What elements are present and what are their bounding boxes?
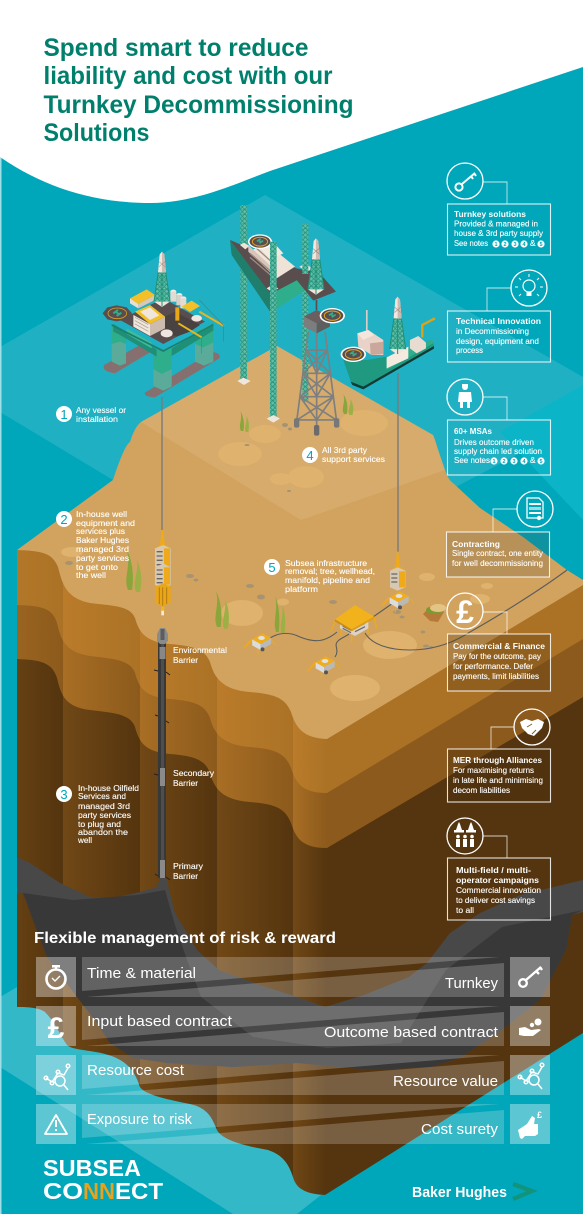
jack-up rig — [230, 224, 336, 315]
note 5 — [264, 558, 375, 594]
note 2: 2 — [60, 512, 68, 527]
panel: turnkey solutions: Turnkey solutions — [454, 209, 526, 219]
panel: turnkey solutions: 5 — [539, 242, 543, 248]
white header wave — [0, 0, 583, 203]
icon: light bulb — [511, 270, 547, 306]
note 3: party services — [78, 810, 131, 820]
note 3: Services and — [78, 791, 126, 801]
logo: Subsea Connect — [43, 1155, 164, 1204]
note 5: Subsea infrastructure — [285, 558, 367, 568]
note 4 — [302, 445, 385, 464]
barrier label: primary — [173, 861, 204, 881]
note 4: All 3rd party — [322, 445, 368, 455]
panel: MSAs: 5 — [539, 459, 543, 465]
barrier label: secondary — [173, 768, 215, 788]
panel: MSAs: supply chain led solution — [454, 446, 542, 456]
panel: contracting: Contracting — [452, 539, 500, 549]
panel: technical innovation: design, equipment and — [456, 336, 539, 346]
bar labels: Resource value — [393, 1074, 498, 1090]
note 5: 5 — [268, 560, 276, 575]
jack-up rig legs back — [237, 205, 308, 423]
note 5: platform — [285, 584, 318, 594]
icon: resource network — [44, 1064, 70, 1090]
barrier label: secondary: Secondary — [173, 768, 215, 778]
left edge strip — [0, 0, 2, 1214]
well bore — [154, 628, 170, 880]
icon: platforms and people — [447, 818, 483, 854]
note 3: well — [77, 835, 92, 845]
subsea manifold — [331, 605, 377, 642]
icon: hand with coin — [519, 1018, 542, 1036]
panel: MSAs: 3 — [512, 459, 516, 465]
right tool stack — [390, 552, 405, 591]
rock block cross section — [17, 540, 583, 1200]
bottom panel: flexible management — [34, 930, 550, 1144]
panel: MSAs: 4 — [522, 459, 526, 465]
title — [44, 34, 354, 147]
icon: thumbs up: £ — [537, 1110, 542, 1120]
icon: document — [517, 491, 553, 527]
cables — [270, 570, 567, 657]
icon squares — [36, 957, 550, 1144]
rocks — [65, 423, 433, 648]
riser left — [161, 397, 163, 530]
panel: multi-field campaigns: Multi-field / multi- — [456, 865, 531, 875]
note 1 — [56, 405, 126, 424]
panel: turnkey solutions: See notes — [454, 238, 488, 248]
icon: network — [518, 1063, 544, 1089]
panel: MER through alliances: in late life and minimising — [453, 775, 543, 785]
note 5: manifold, pipeline and — [285, 575, 370, 585]
note 2 — [56, 509, 135, 580]
logo: Subsea Connect: ECT — [115, 1178, 164, 1204]
icon: thumbs up — [518, 1110, 542, 1139]
ROV unit left — [244, 633, 276, 655]
logo: Subsea Connect: SUBSEA — [43, 1155, 141, 1181]
bar labels: Input based contract — [87, 1014, 232, 1030]
title: Turnkey Decommissioning — [44, 91, 354, 119]
note 3 — [56, 783, 139, 845]
row 3 bars — [82, 1055, 504, 1095]
note 2: party services — [76, 553, 129, 563]
note 1: Any vessel or — [76, 405, 126, 415]
title: Solutions — [44, 119, 150, 147]
panel: contracting: Single contract, one entity — [452, 548, 544, 558]
note 2: Baker Hughes — [76, 535, 129, 545]
note 1: 1 — [60, 407, 68, 422]
ROV unit right — [381, 591, 414, 613]
note 2: to get onto — [76, 562, 118, 572]
panel: contracting: for well decommissioning — [452, 558, 543, 568]
panel: multi-field campaigns — [447, 818, 550, 920]
note 2: services plus — [76, 526, 125, 536]
panel: MER through alliances: MER through Alliances — [453, 755, 542, 765]
panel: turnkey solutions: & — [530, 238, 536, 248]
barrier label: environmental: Environmental — [173, 645, 227, 655]
panel: MSAs: 1 — [492, 459, 496, 465]
heading: Flexible management of risk & reward — [34, 930, 336, 947]
panel: technical innovation: process — [456, 345, 483, 355]
bar labels — [87, 966, 499, 1138]
title: liability and cost with our — [44, 62, 333, 90]
barrier label: environmental — [173, 645, 227, 665]
panel: technical innovation — [448, 270, 550, 362]
panel: technical innovation: Technical Innovation — [456, 316, 541, 326]
panel: commercial and finance: for performance. Defer — [453, 661, 533, 671]
note 2: equipment and — [76, 518, 135, 528]
bar labels: Turnkey — [445, 976, 499, 992]
panel: MER through alliances — [448, 709, 550, 802]
logo: Subsea Connect: NN — [83, 1178, 115, 1204]
panel: MSAs: 2 — [502, 459, 506, 465]
well intervention tool stack — [155, 530, 171, 615]
panel: MSAs: See notes — [454, 455, 490, 465]
panel: multi-field campaigns: to all — [456, 905, 474, 915]
panel: technical innovation: in Decommissioning — [456, 326, 529, 336]
seabed surface — [17, 346, 583, 739]
barrier label: primary: Primary — [173, 861, 204, 871]
panel: multi-field campaigns: to deliver cost savings — [456, 895, 535, 905]
bar labels: Cost surety — [421, 1122, 499, 1138]
barrier label: environmental: Barrier — [173, 655, 198, 665]
note 3: 3 — [60, 787, 68, 802]
panel: MSAs: 60+ MSAs — [454, 426, 492, 436]
note 3: to plug and — [78, 819, 121, 829]
lighter seabed diamond — [0, 195, 583, 490]
panel: turnkey solutions: 1 — [494, 242, 498, 248]
seabed mound — [423, 604, 446, 622]
riser right — [397, 373, 399, 552]
panel: turnkey solutions: 2 — [503, 242, 507, 248]
panel: turnkey solutions: 4 — [522, 242, 526, 248]
note 4: support services — [322, 454, 385, 464]
title: Spend smart to reduce — [44, 34, 309, 62]
panel: MER through alliances: For maximising returns — [453, 765, 534, 775]
note 3: managed 3rd — [78, 801, 130, 811]
icon: worker — [447, 379, 483, 415]
panel: commercial and finance: Commercial & Finance — [453, 641, 545, 651]
bar labels: Resource cost — [87, 1063, 184, 1079]
panel: multi-field campaigns: Commercial innovation — [456, 885, 541, 895]
barrier label: secondary: Barrier — [173, 778, 198, 788]
icon: warning triangle — [45, 1115, 67, 1134]
ROV unit lower — [307, 656, 340, 678]
bar labels: Time & material — [87, 966, 196, 982]
note 2: In-house well — [76, 509, 127, 519]
brighter sea wedge — [500, 385, 583, 520]
panel: turnkey solutions — [447, 163, 550, 255]
logo: Baker Hughes: Baker Hughes — [412, 1184, 507, 1201]
icon: pound: £ — [48, 1012, 65, 1045]
panel: commercial and finance — [447, 593, 550, 691]
panel: multi-field campaigns: operator campaigns — [456, 875, 539, 885]
panel: turnkey solutions: 3 — [513, 242, 517, 248]
panel: commercial and finance: Pay for the outcome, pay — [453, 651, 542, 661]
note 1: installation — [76, 414, 118, 424]
note 3: abandon the — [78, 827, 128, 837]
icon: handshake — [514, 709, 550, 745]
row 2 bars — [82, 1006, 504, 1046]
logo: Subsea Connect: CO — [43, 1178, 83, 1204]
panel: commercial and finance: payments, limit liabilities — [453, 671, 539, 681]
sand patches — [61, 410, 493, 701]
subsea seaweed — [126, 394, 353, 634]
panel: MER through alliances: decom liabilities — [453, 785, 510, 795]
barrier label: primary: Barrier — [173, 871, 198, 881]
note 4: 4 — [306, 448, 314, 463]
icon: stopwatch — [46, 965, 66, 988]
note 2: the well — [76, 570, 106, 580]
note 2: managed 3rd — [76, 544, 129, 554]
panel: turnkey solutions: Provided & managed in — [454, 218, 538, 228]
icon: key circle — [447, 163, 483, 199]
note 3: In-house Oilfield — [78, 783, 139, 793]
bar labels: Outcome based contract — [324, 1025, 498, 1041]
fixed jacket platform — [294, 300, 345, 436]
panel: turnkey solutions: house & 3rd party supply — [454, 228, 544, 238]
panel: contracting — [446, 491, 553, 577]
panel: MSAs — [447, 379, 550, 475]
semi-submersible rig — [103, 252, 224, 397]
bar labels: Exposure to risk — [87, 1112, 193, 1128]
row 1 bars — [82, 957, 504, 997]
note 5: removal; tree, wellhead, — [285, 566, 375, 576]
icon: pound: £ — [456, 594, 474, 630]
icon: key — [519, 967, 542, 987]
oil reservoir — [17, 857, 583, 1070]
light sea strip bottom left — [0, 915, 340, 1214]
row 4 bars — [82, 1104, 504, 1144]
panel: MSAs: & — [530, 455, 536, 465]
panel: MSAs: Drives outcome driven — [454, 437, 534, 447]
drillship vessel — [341, 297, 435, 389]
